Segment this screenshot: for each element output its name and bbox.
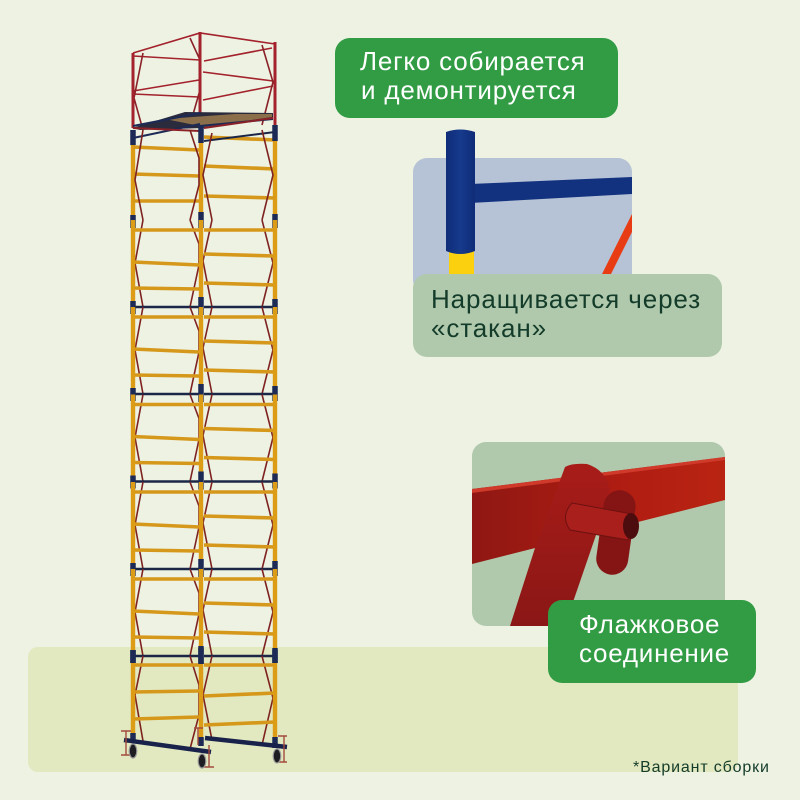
- badge: easy assembly: [335, 38, 618, 118]
- badge text: Флажковое: [579, 609, 720, 639]
- scaffold top guard frame: [133, 32, 275, 130]
- photo panel background: [472, 442, 725, 626]
- photo: socket joint: [413, 130, 632, 294]
- photo: flag connection: [472, 442, 725, 626]
- photo panel background: [413, 158, 632, 294]
- badge: flag connection: [548, 600, 756, 683]
- illustration: scaffold tower: [121, 32, 287, 768]
- yellow post: [449, 250, 474, 278]
- flag latch: [594, 488, 638, 577]
- upper rungs: [133, 125, 275, 228]
- flat plate: [510, 464, 610, 626]
- badge text: «стакан»: [431, 313, 547, 343]
- repeated frame sections: [133, 220, 275, 664]
- red beam: [472, 457, 725, 564]
- pin: [565, 503, 632, 540]
- blue horizontal bar: [470, 177, 632, 203]
- scaffold platform: [132, 112, 273, 138]
- badge text: и демонтируется: [361, 75, 577, 105]
- ground band: [28, 647, 738, 772]
- badge text: Наращивается через: [431, 284, 701, 314]
- red diagonal brace: [601, 214, 632, 276]
- badge: extends via socket: [413, 274, 722, 357]
- badge text: Легко собирается: [360, 46, 586, 76]
- bottom section and wheels: [121, 648, 287, 768]
- footnote: *Вариант сборки: [633, 759, 770, 776]
- badge text: соединение: [579, 638, 730, 668]
- blue socket post: [446, 130, 475, 254]
